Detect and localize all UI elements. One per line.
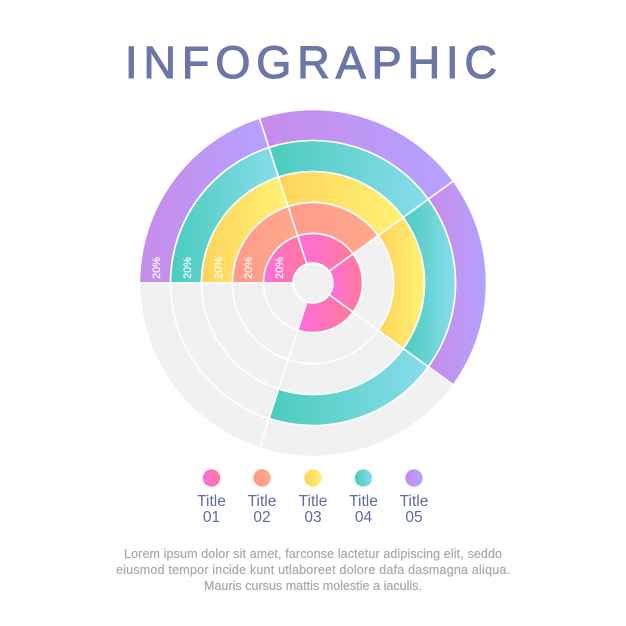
description text: eiusmod tempor incide kunt utlaboreet dolore dafa dasmagna aliqua. — [116, 563, 510, 577]
radial chart — [140, 110, 486, 456]
legend item 03: Title — [299, 493, 327, 510]
description text: Lorem ipsum dolor sit amet, farconse lactetur adipiscing elit, seddo — [124, 547, 502, 561]
legend item 02: Title — [248, 493, 276, 510]
legend item 05: 05 — [405, 509, 423, 526]
legend item 04: 04 — [355, 509, 372, 526]
legend — [197, 469, 428, 526]
legend item 01 — [197, 469, 226, 526]
percentage labels: 20% — [243, 257, 255, 279]
percentage labels: 20% — [151, 257, 163, 279]
description text: Mauris cursus mattis molestie a iaculis. — [204, 579, 422, 593]
centre hub — [294, 264, 332, 302]
description text — [116, 547, 510, 593]
title: INFOGRAPHIC — [125, 37, 497, 88]
segment 2: fully coloured sector — [259, 110, 453, 271]
percentage labels: 20% — [182, 257, 194, 279]
segment 5: empty grey sector — [140, 283, 307, 448]
legend item 04 — [349, 469, 378, 526]
percentage labels — [151, 257, 286, 279]
legend item 05: Title — [400, 493, 428, 510]
legend item 03 — [299, 469, 327, 526]
percentage labels: 20% — [274, 257, 286, 279]
legend item 01: 01 — [203, 509, 220, 526]
legend item 05 — [400, 469, 428, 526]
segment 1: fully coloured sector — [140, 118, 307, 283]
legend item 01: Title — [197, 493, 226, 510]
segment 3: purple, teal, yellow, pink coloured — [329, 181, 486, 385]
segment 4: teal and pink coloured — [259, 295, 453, 456]
percentage labels: 20% — [213, 257, 225, 279]
legend item 04: Title — [349, 493, 378, 510]
legend item 02: 02 — [253, 509, 271, 526]
legend item 02 — [248, 469, 276, 526]
legend item 03: 03 — [304, 509, 322, 526]
